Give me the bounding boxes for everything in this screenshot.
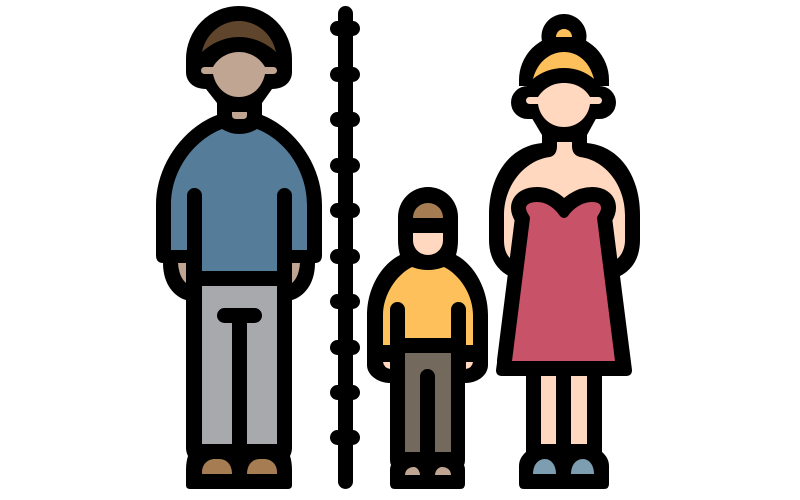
woman hair (533, 52, 594, 79)
child face (413, 233, 443, 255)
figure: woman (489, 14, 640, 489)
man left arm line (187, 188, 202, 290)
height ruler (330, 6, 360, 489)
child left arm line (390, 302, 405, 360)
child hair (413, 203, 443, 218)
woman right leg (571, 376, 587, 444)
woman silhouette (489, 14, 640, 489)
man left hand (178, 263, 186, 283)
woman left leg (541, 376, 556, 444)
child silhouette (367, 187, 488, 489)
woman dress (512, 202, 615, 361)
figure: child (367, 187, 488, 489)
child right arm line (451, 302, 466, 360)
man right arm line (277, 188, 292, 290)
child trousers (405, 353, 451, 452)
figure: man (156, 6, 322, 489)
man face (201, 52, 277, 97)
man left shoe (202, 459, 232, 474)
child right hand (466, 362, 473, 369)
woman face (526, 83, 602, 127)
woman hair bun (556, 29, 572, 37)
woman right shoe (571, 459, 594, 474)
man hair (202, 21, 276, 52)
man right shoe (247, 459, 277, 474)
man shirt (171, 129, 307, 271)
child left hand (383, 362, 390, 369)
child right shoe (435, 467, 451, 475)
man trousers (202, 286, 277, 444)
child shirt (383, 267, 473, 345)
man right hand (292, 263, 300, 283)
man silhouette (156, 6, 322, 489)
woman left shoe (533, 459, 556, 474)
man neck (232, 112, 247, 119)
child left shoe (405, 467, 420, 475)
woman neck and shoulders (504, 142, 625, 262)
